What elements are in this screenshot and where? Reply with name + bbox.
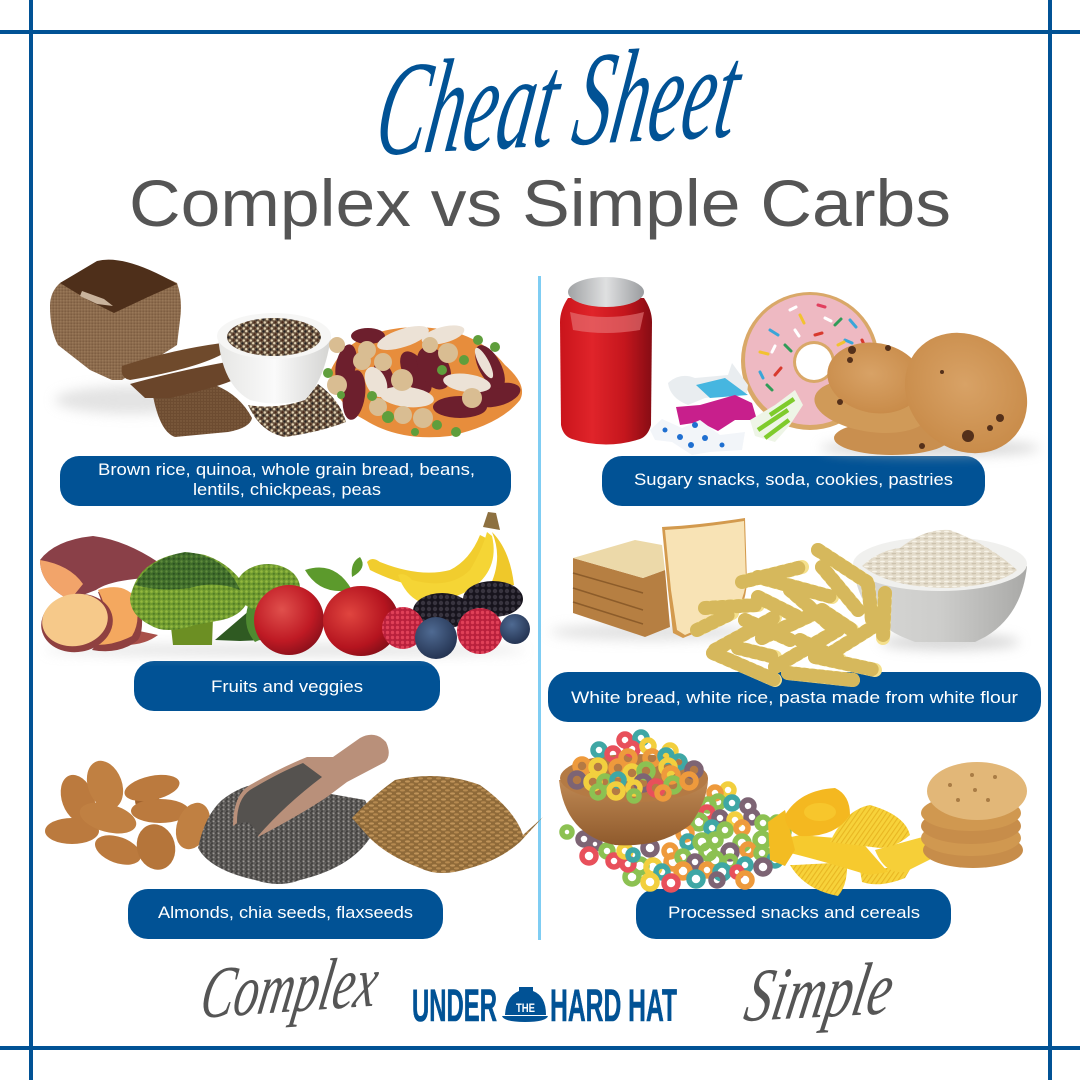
pill: complex row 3: Almonds, chia seeds, flaxseeds — [158, 903, 413, 922]
sliced white bread stack — [573, 540, 670, 637]
pill: complex row 2 — [134, 661, 440, 711]
label: Simple: Simple — [739, 946, 901, 1038]
title: Cheat Sheet: Cheat Sheet — [367, 16, 752, 185]
pill: simple row 2: White bread, white rice, pasta made from white flour — [571, 688, 1018, 707]
apple 1 — [254, 585, 324, 655]
pill: complex row 3 — [128, 889, 443, 939]
potato chips — [768, 788, 933, 896]
sweet potato — [37, 536, 158, 658]
icon: hard hat — [502, 987, 548, 1022]
center divider — [538, 276, 541, 940]
donut — [741, 292, 879, 430]
almonds — [45, 756, 216, 874]
image: nuts and seeds — [45, 735, 543, 884]
wooden scoop — [233, 735, 389, 837]
beans, lentils, chickpeas and peas pile — [323, 321, 523, 437]
rice bowl — [853, 530, 1027, 642]
pill: complex row 1: Brown rice, quinoa, whole grain bread, beans, — [98, 460, 475, 479]
wooden bowl with cereal — [559, 732, 708, 845]
apple 2 — [323, 586, 399, 656]
raspberries and blueberries — [382, 607, 530, 659]
loose cereal — [562, 784, 789, 890]
pill: complex row 1 — [60, 456, 511, 506]
pill: simple row 1: Sugary snacks, soda, cookies, pastries — [634, 470, 953, 489]
heading: Complex vs Simple Carbs: Complex vs Simple Carbs — [129, 166, 951, 240]
quinoa bowl — [217, 313, 346, 437]
label: Complex: Complex — [195, 941, 385, 1035]
blackberries — [413, 581, 523, 629]
flaxseeds — [352, 776, 543, 873]
bread slices — [122, 343, 252, 437]
cookies — [811, 308, 1052, 478]
apple leaves — [305, 557, 363, 591]
pill: complex row 1: lentils, chickpeas, peas — [193, 480, 381, 499]
image: refined grains — [550, 518, 1027, 680]
logo: Under the Hard Hat: HARD HAT — [550, 980, 677, 1031]
crackers — [921, 762, 1027, 868]
chia seeds — [198, 783, 372, 884]
soda can — [560, 277, 652, 444]
bread loaf — [50, 260, 181, 380]
broccoli — [130, 552, 300, 645]
image: whole grains and legumes — [50, 260, 523, 437]
logo: Under the Hard Hat: UNDER — [412, 980, 497, 1031]
candies — [650, 363, 803, 455]
pill: simple row 1 — [602, 456, 985, 506]
pill: complex row 2: Fruits and veggies — [211, 677, 363, 696]
image: fruits and vegetables — [37, 512, 530, 659]
image: processed snacks — [559, 732, 1027, 896]
pill: simple row 3 — [636, 889, 951, 939]
logo: Under the Hard Hat — [412, 980, 677, 1031]
fusilli pasta — [697, 550, 885, 680]
image: sugary snacks — [560, 277, 1052, 478]
pill: simple row 2 — [548, 672, 1041, 722]
pill: simple row 3: Processed snacks and cereals — [668, 903, 920, 922]
standing bread slice — [662, 518, 747, 638]
bananas — [367, 512, 514, 602]
icon: hard hat: THE — [516, 1001, 535, 1015]
